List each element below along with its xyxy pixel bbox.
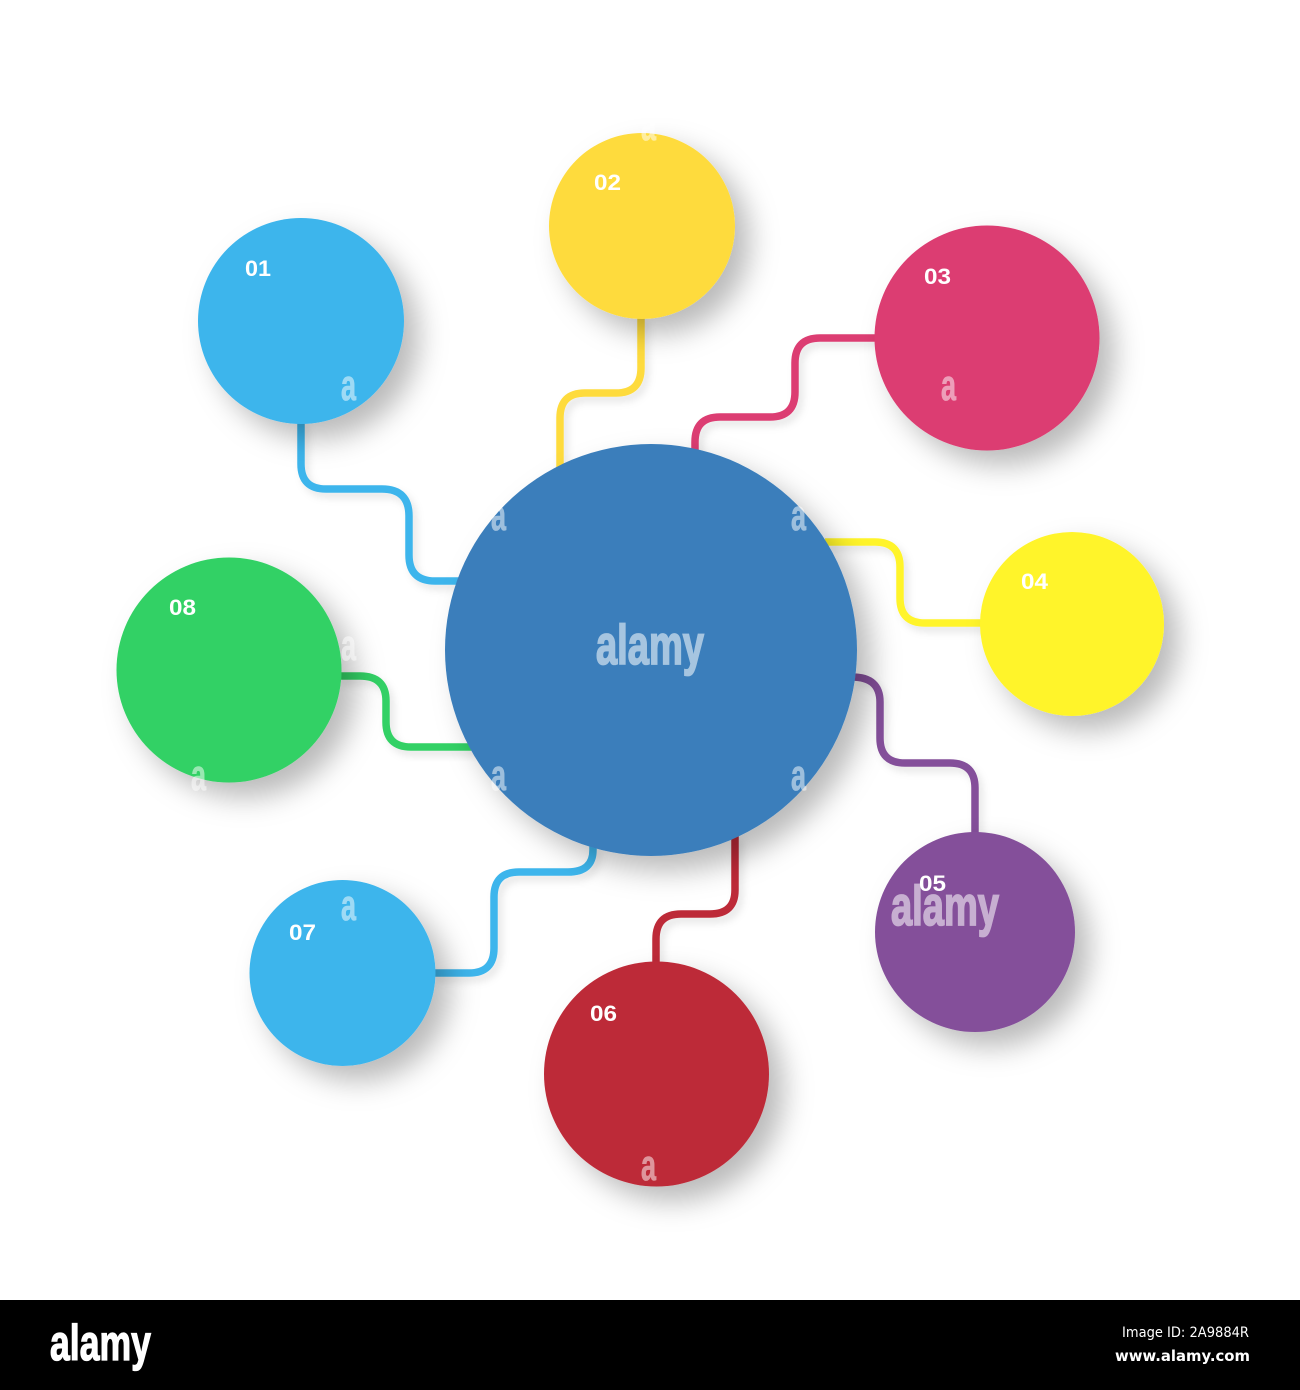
footer bar: [0, 1300, 1300, 1390]
watermark: small marks: a: [491, 751, 506, 800]
node 06: [544, 962, 769, 1186]
watermark: center: alamy: [596, 613, 704, 676]
node 02: 02: [594, 170, 621, 195]
watermark: small marks: a: [341, 621, 356, 670]
node 01: [198, 218, 404, 424]
watermark: small marks: [191, 101, 956, 1190]
node 01: 01: [245, 256, 271, 281]
node 03: [874, 226, 1100, 450]
connector: 02: [560, 316, 641, 468]
central hub: [445, 444, 857, 856]
watermark: small marks: a: [491, 491, 506, 540]
node 02: [549, 133, 735, 319]
watermark: small marks: a: [941, 361, 956, 410]
watermark: small marks: a: [791, 491, 806, 540]
watermark: over node 05: alamy: [891, 874, 999, 937]
number 05: 05: [919, 871, 946, 896]
footer logo: alamy: [50, 1315, 151, 1371]
node 07: [250, 880, 436, 1066]
connector: 05: [852, 677, 975, 836]
connector: 06: [656, 835, 735, 966]
node 07: 07: [289, 920, 316, 945]
watermark: small marks: a: [641, 101, 656, 150]
node 03: 03: [924, 264, 951, 289]
node 06: 06: [590, 1001, 617, 1026]
watermark: small marks: a: [191, 751, 206, 800]
connector: 03: [695, 338, 878, 455]
watermark: small marks: a: [641, 1141, 656, 1190]
watermark: small marks: a: [341, 881, 356, 930]
node 04: [980, 532, 1164, 716]
watermark: small marks: a: [341, 361, 356, 410]
footer url: www.alamy.com: [1115, 1347, 1250, 1365]
node 05: [875, 832, 1075, 1032]
node 04: 04: [1021, 569, 1049, 594]
connector: 01: [301, 420, 462, 581]
connector: 04: [825, 542, 984, 623]
connector: 08: [338, 676, 474, 747]
node 08: 08: [169, 595, 196, 620]
node 08: [116, 558, 342, 782]
connector: 07: [432, 845, 593, 973]
watermark: small marks: a: [791, 751, 806, 800]
footer image id: Image ID: 2A9884R: [1122, 1325, 1249, 1341]
